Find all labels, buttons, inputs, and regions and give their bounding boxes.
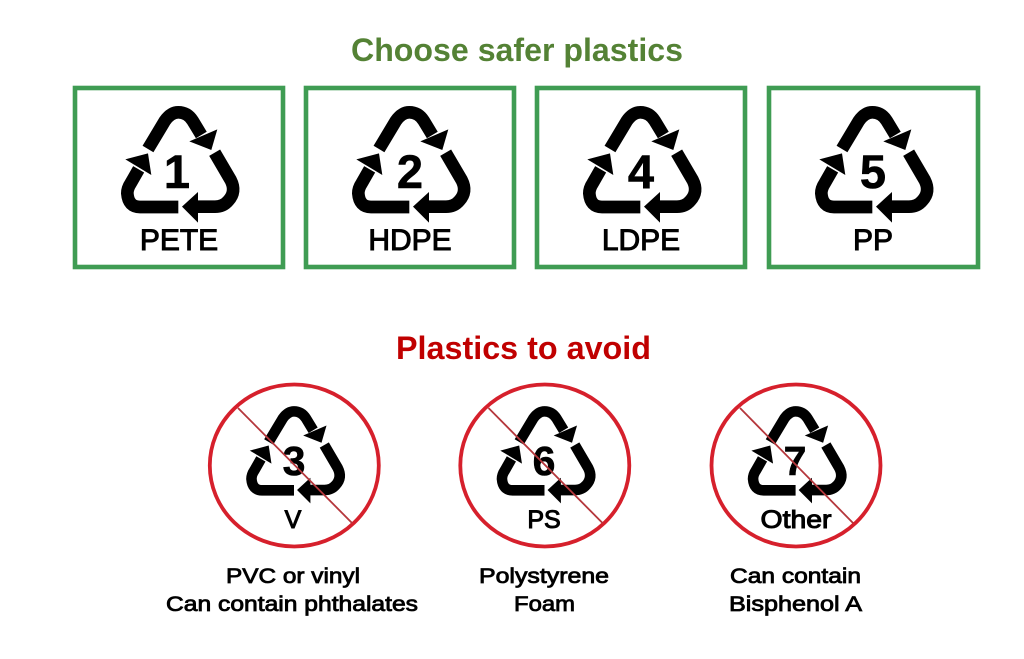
text block: bisphenol caption <box>729 565 862 616</box>
panel: avoid plastic 6 PS: 6 <box>533 438 555 484</box>
panel: safer plastic 1 PETE <box>75 88 283 267</box>
text block: PVC caption: PVC or vinyl <box>226 565 360 588</box>
panel: safer plastic 4 LDPE: LDPE <box>602 224 680 257</box>
panel: avoid plastic 6 PS: PS <box>527 506 561 534</box>
text block: bisphenol caption: Bisphenol A <box>729 593 862 616</box>
panel: safer plastic 5 PP: 5 <box>860 145 886 198</box>
text block: polystyrene caption: Foam <box>514 593 575 616</box>
text block: polystyrene caption <box>479 565 609 616</box>
panel: safer plastic 5 PP: PP <box>853 224 893 257</box>
panel: avoid plastic 6 PS <box>460 384 629 546</box>
text block: polystyrene caption: Polystyrene <box>479 565 609 588</box>
icon: recycling arrows 4 <box>587 112 695 223</box>
panel: avoid plastic 3 V: 3 <box>283 438 305 484</box>
panel: avoid plastic 3 V <box>210 384 379 546</box>
icon: recycling arrows 5 <box>819 112 927 223</box>
icon: recycling arrows 6 <box>500 411 590 503</box>
panel: safer plastic 1 PETE: 1 <box>164 145 190 198</box>
title: choose safer plastics: Choose safer plastics <box>351 32 683 68</box>
title: plastics to avoid: Plastics to avoid <box>396 330 651 366</box>
panel: safer plastic 5 PP <box>769 88 978 267</box>
panel: safer plastic 2 HDPE: 2 <box>397 145 423 198</box>
panel: safer plastic 2 HDPE: HDPE <box>368 224 452 257</box>
panel: avoid plastic 7 Other <box>712 384 880 546</box>
panel: safer plastic 4 LDPE <box>537 88 745 267</box>
panel: avoid plastic 7 Other: 7 <box>784 438 806 484</box>
panel: safer plastic 4 LDPE: 4 <box>628 145 654 198</box>
icon: recycling arrows 3 <box>250 411 340 503</box>
panel: avoid plastic 7 Other: Other <box>760 506 832 534</box>
panel: avoid plastic 3 V: V <box>285 506 302 534</box>
panel: safer plastic 1 PETE: PETE <box>140 224 218 257</box>
text block: bisphenol caption: Can contain <box>730 565 861 588</box>
text block: PVC caption: Can contain phthalates <box>166 593 418 616</box>
icon: recycling arrows 7 <box>751 411 841 503</box>
icon: recycling arrows 1 <box>125 112 233 223</box>
icon: recycling arrows 2 <box>356 112 464 223</box>
text block: PVC caption <box>166 565 418 616</box>
panel: safer plastic 2 HDPE <box>306 88 514 267</box>
